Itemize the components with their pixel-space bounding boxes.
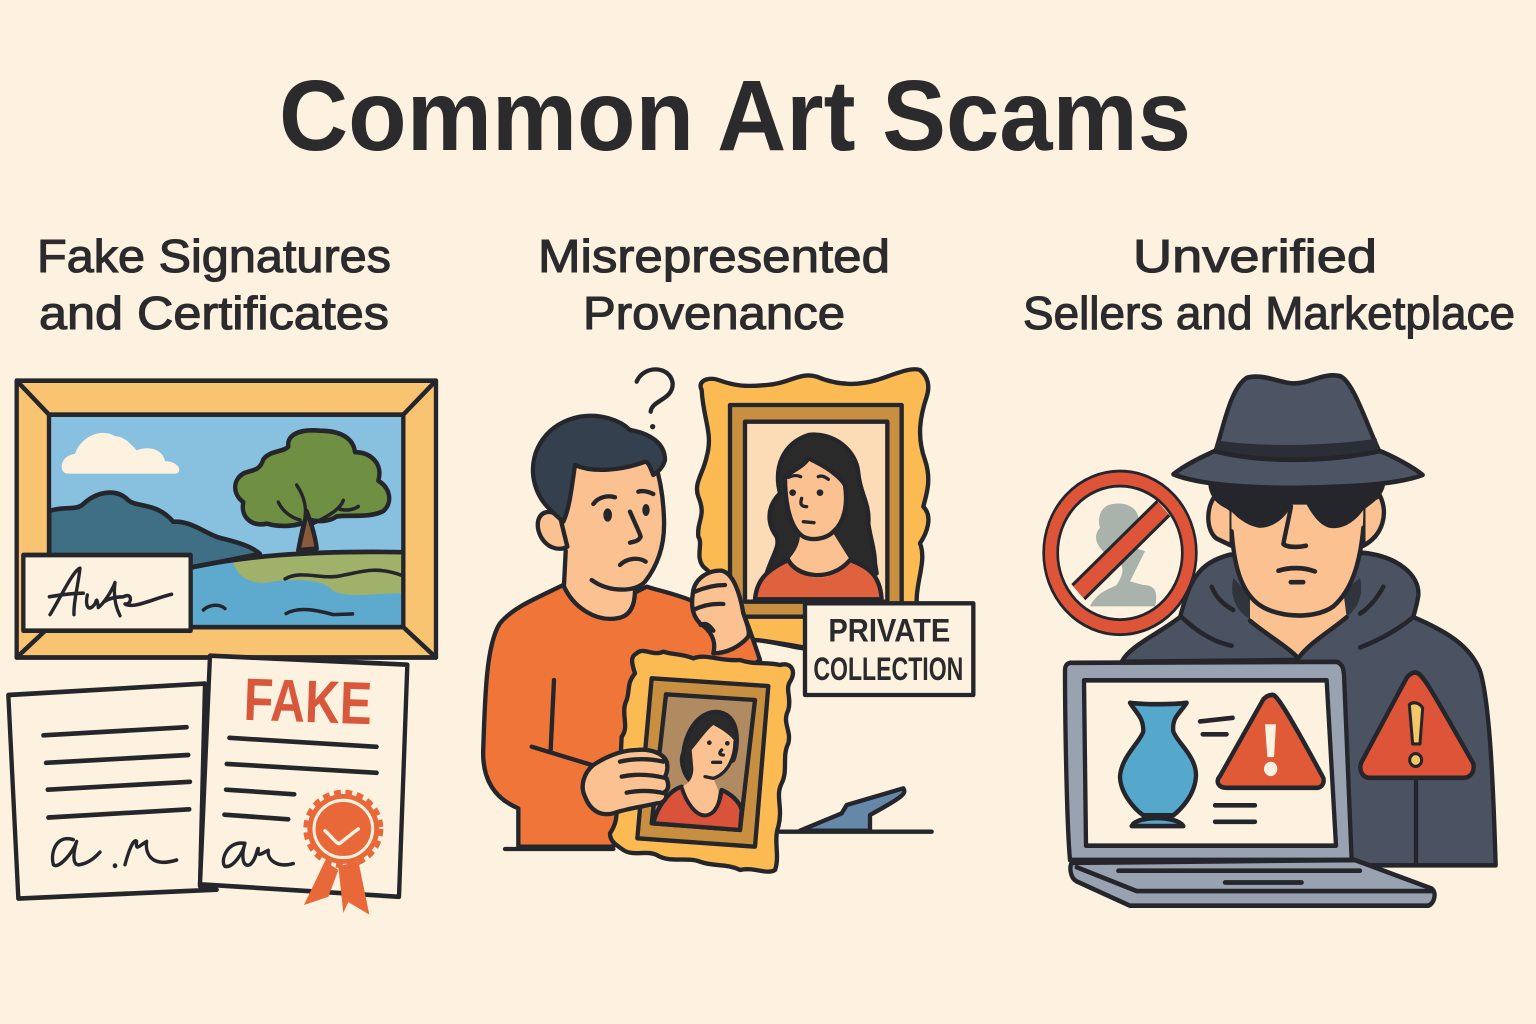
- icon: left document: [8, 684, 217, 899]
- heading: fake signatures: [37, 230, 391, 339]
- portrait of woman: [755, 435, 882, 599]
- icon: man in orange sweater: [483, 416, 760, 847]
- icon: fake certificate: [200, 656, 407, 915]
- heading: fake signatures: and Certificates: [39, 287, 389, 339]
- icon: signature label: [23, 555, 191, 631]
- heading: unverified sellers: Sellers and Marketplace: [1023, 287, 1515, 339]
- panel: fake signatures illustration: [8, 381, 436, 915]
- icon: ornate portrait frame: [697, 369, 928, 648]
- heading: misrepresented provenance: Misrepresented: [538, 230, 890, 282]
- icon: hooded figure: [1122, 375, 1496, 865]
- title: Common Art Scams: [279, 60, 1191, 172]
- icon: framed landscape painting: [17, 381, 436, 657]
- callout: private collection: [805, 603, 973, 695]
- icon: desk and stamp: [505, 788, 932, 849]
- icon: small ornate frame held: [610, 651, 793, 872]
- icon: laptop: [1065, 662, 1435, 906]
- heading: misrepresented provenance: [538, 230, 890, 339]
- raised hand: [692, 571, 749, 653]
- text: FAKE stamp: FAKE: [243, 666, 373, 737]
- callout: private collection: COLLECTION: [813, 651, 963, 687]
- panel: unverified sellers illustration: [1051, 375, 1496, 906]
- panel: misrepresented provenance illustration: [483, 369, 973, 872]
- hat: [1173, 375, 1423, 488]
- icon: question mark: [637, 369, 673, 429]
- heading: unverified sellers: Unverified: [1133, 230, 1377, 282]
- icon: warning on hoodie: [1360, 672, 1474, 864]
- icon: rosette seal: [304, 792, 381, 915]
- callout: private collection: PRIVATE: [828, 613, 950, 649]
- raised hand fingers: [693, 585, 725, 631]
- heading: fake signatures: Fake Signatures: [37, 230, 391, 282]
- icon: listing warning: [1218, 695, 1324, 788]
- heading: misrepresented provenance: Provenance: [583, 287, 845, 339]
- icon: hand holding frame: [583, 750, 668, 814]
- icon: vase: [1120, 703, 1196, 826]
- heading: unverified sellers: [1023, 230, 1515, 339]
- icon: prohibition sign: [1051, 479, 1189, 627]
